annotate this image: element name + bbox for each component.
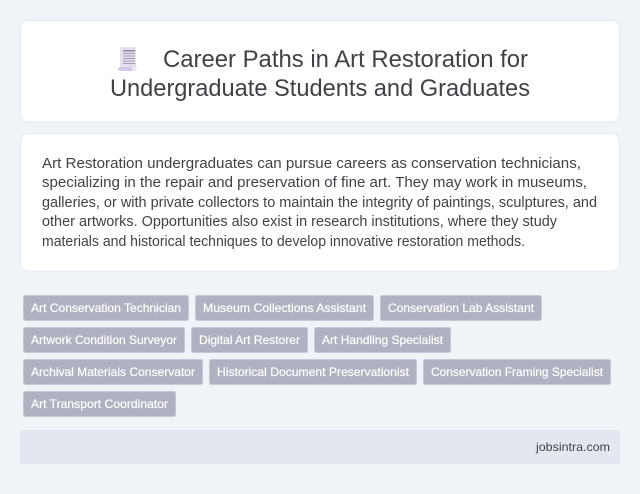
panel: description	[20, 134, 620, 271]
text block: description: other artworks. Opportunities also exist in research institutions, where they study	[42, 214, 558, 230]
tag: Historical Document Preservationist	[217, 365, 410, 379]
text block: description: specializing in the repair and preservation of fine art. They may work in museums,	[42, 175, 587, 191]
tag: Art Handling Specialist	[322, 333, 444, 347]
panel: header	[20, 20, 620, 122]
title: Undergraduate Students and Graduates	[110, 75, 530, 102]
icon: scroll document	[118, 47, 137, 71]
tag	[314, 328, 450, 352]
tag: Art Transport Coordinator	[31, 397, 168, 411]
tag: Conservation Framing Specialist	[431, 365, 604, 379]
tag	[24, 360, 202, 384]
text block: description	[42, 156, 597, 250]
tag	[192, 328, 308, 352]
text block: description: galleries, or with private collectors to maintain the integrity of paintings, sculptures, and	[42, 195, 597, 211]
tag: Art Conservation Technician	[31, 301, 181, 315]
tags: career list	[24, 296, 610, 416]
text block: description: materials and historical techniques to develop innovative restoration methods.	[42, 234, 525, 250]
text block: description: Art Restoration undergraduates can pursue careers as conservation technicians,	[42, 156, 581, 172]
tag: Artwork Condition Surveyor	[31, 333, 177, 347]
tag	[24, 328, 184, 352]
tag	[210, 360, 416, 384]
footer	[20, 430, 620, 464]
tag: Museum Collections Assistant	[203, 301, 367, 315]
tag: Conservation Lab Assistant	[388, 301, 535, 315]
tag	[380, 296, 542, 320]
tag	[24, 296, 188, 320]
tag: Archival Materials Conservator	[31, 365, 195, 379]
tag	[24, 392, 176, 416]
tag: Digital Art Restorer	[199, 333, 300, 347]
title	[110, 46, 530, 102]
tag	[196, 296, 374, 320]
title: Career Paths in Art Restoration for	[163, 46, 528, 73]
footer: jobsintra.com	[535, 440, 610, 454]
tag	[424, 360, 610, 384]
